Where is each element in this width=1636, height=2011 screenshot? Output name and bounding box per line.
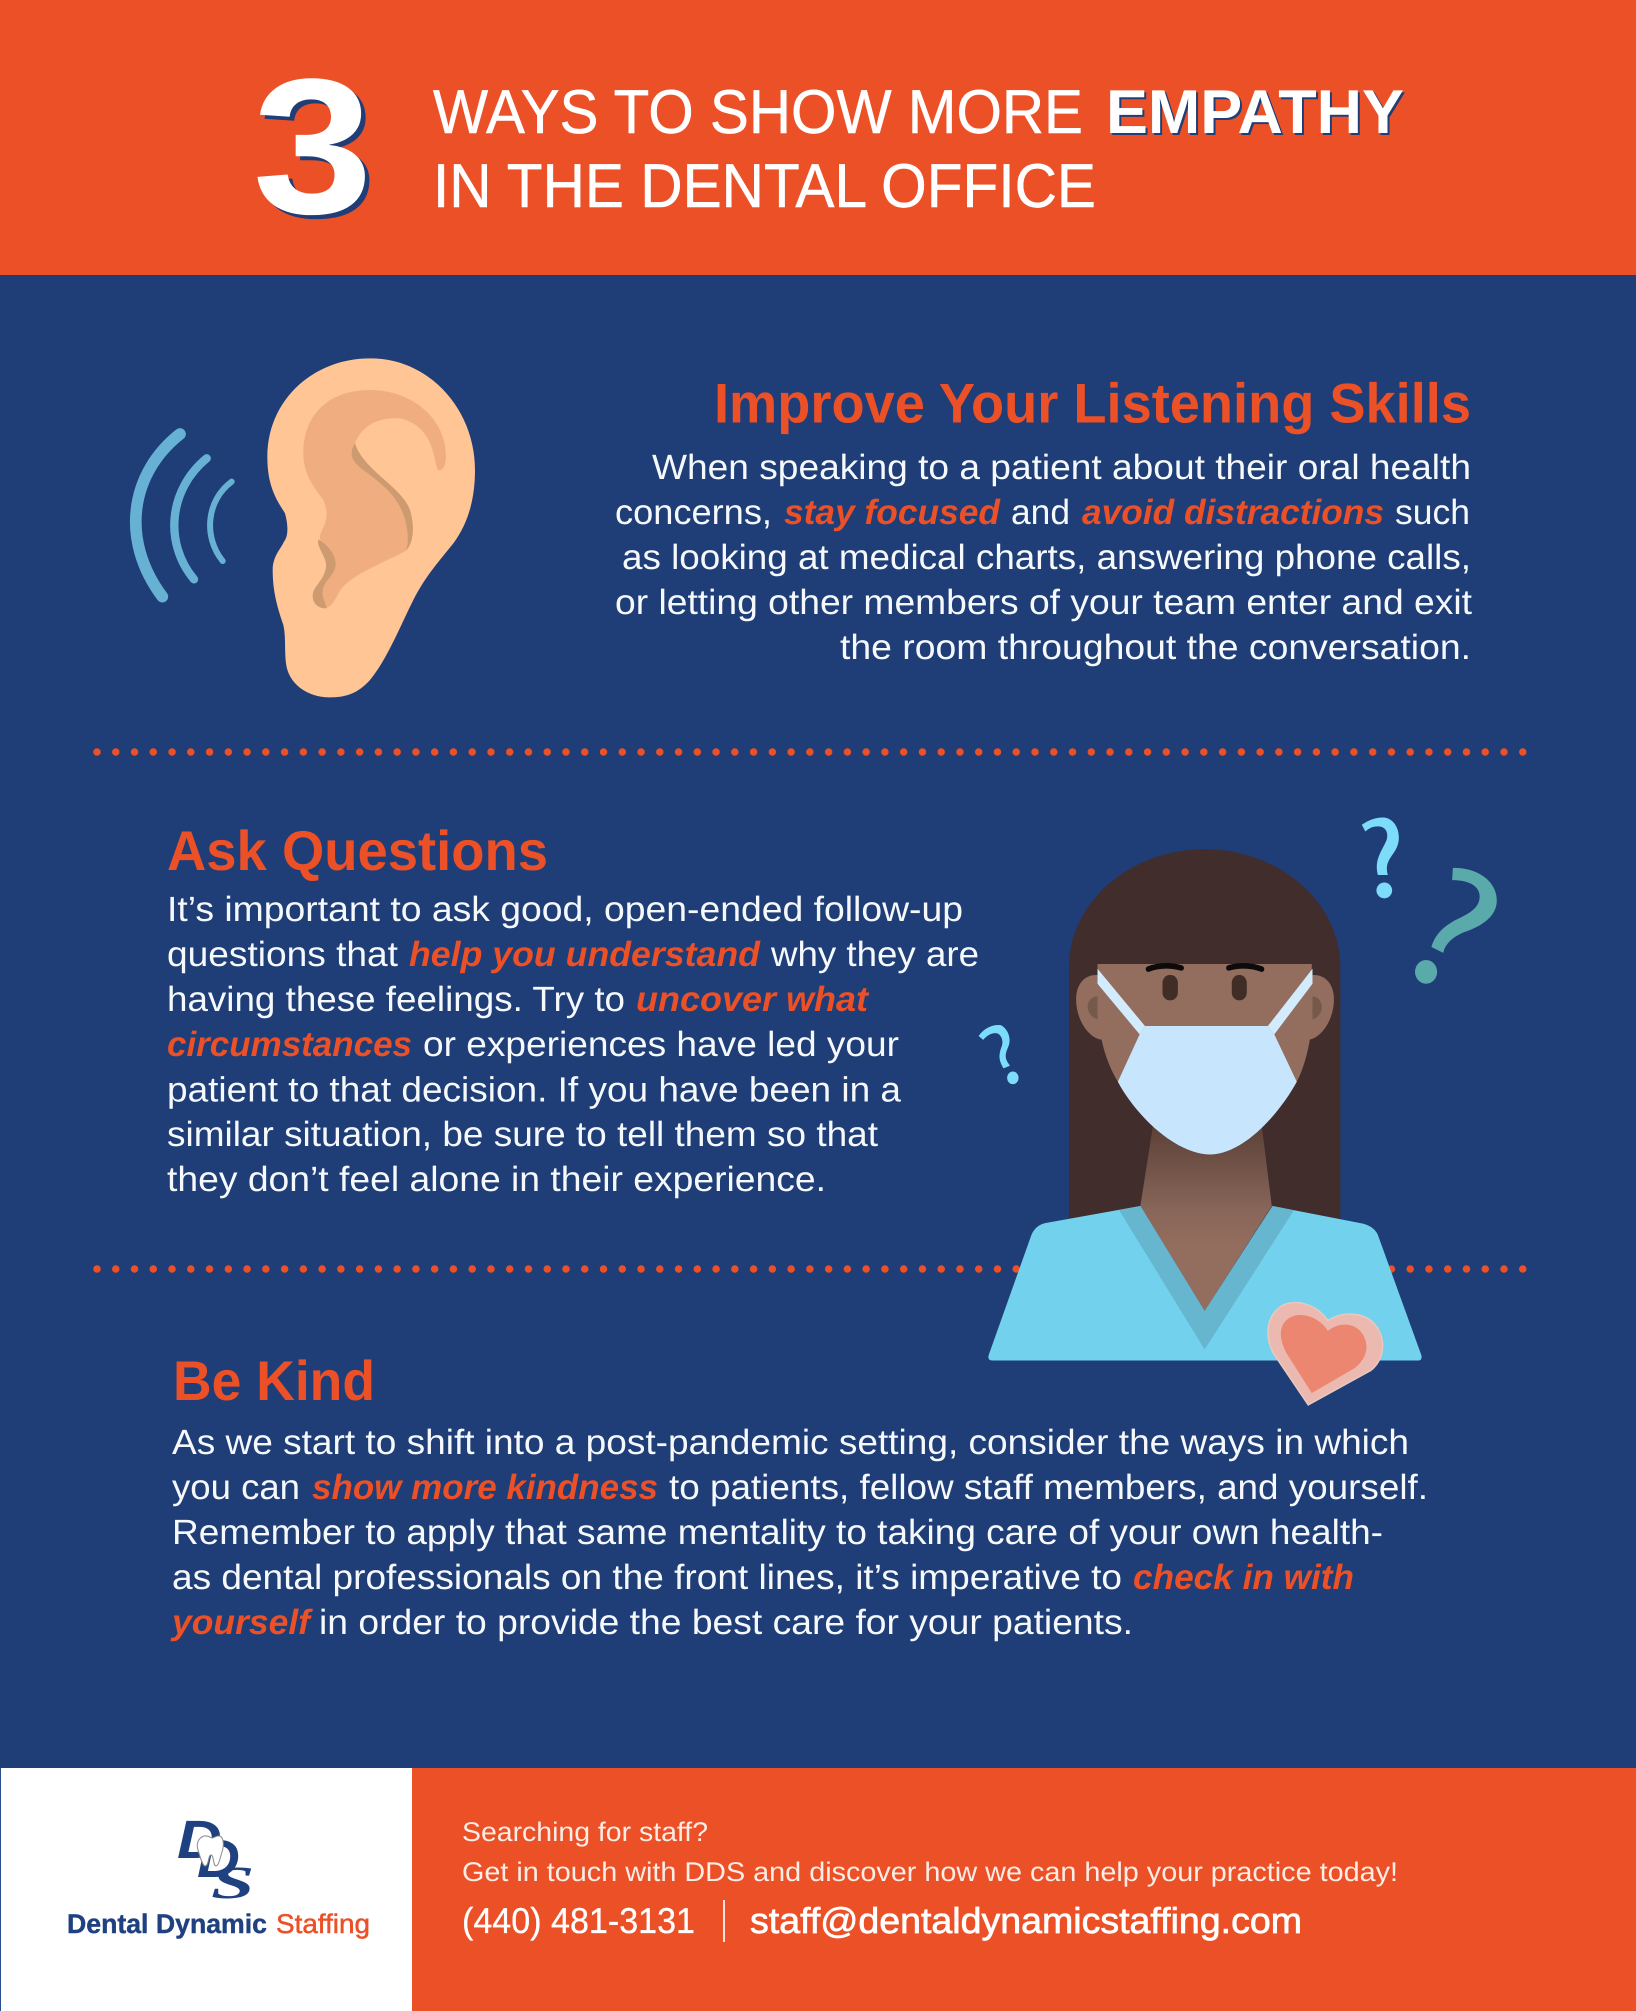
ears — [1076, 975, 1334, 1040]
body text: the room throughout the conversation. — [840, 628, 1471, 667]
hair — [1069, 849, 1340, 1225]
body text: to patients, fellow staff members, and yourself. — [669, 1468, 1428, 1507]
body text: as dental professionals on the front lines, it’s imperative to — [172, 1558, 1122, 1597]
body text: help you understand — [409, 935, 761, 974]
icon: ear with sound waves — [136, 358, 475, 697]
heading: Improve Your Listening Skills — [714, 372, 1471, 434]
contact text: Get in touch with DDS and discover how we can help your practice today! — [462, 1857, 1398, 1887]
section: ask questions — [167, 819, 979, 1199]
body text: they don’t feel alone in their experience. — [167, 1160, 826, 1199]
icon: DDS monogram: D — [197, 1829, 240, 1889]
body text: you can — [172, 1468, 300, 1507]
icon: question mark top — [1362, 817, 1399, 898]
neck — [1140, 1126, 1272, 1311]
icon: DDS monogram: S — [211, 1857, 255, 1908]
body text: or letting other members of your team enter and exit — [615, 583, 1472, 622]
body text: Remember to apply that same mentality to taking care of your own health- — [172, 1513, 1383, 1552]
body text: and — [1011, 493, 1070, 532]
title — [433, 78, 1406, 221]
divider: dotted line 2 — [97, 1265, 1528, 1273]
scrubs — [988, 1206, 1422, 1361]
icon: DDS monogram: D — [177, 1810, 222, 1870]
body text — [167, 890, 979, 1199]
icon: heart — [1268, 1303, 1383, 1405]
eyebrows — [1148, 966, 1262, 969]
body text: why they are — [770, 935, 979, 974]
big numeral 3: 3 — [252, 38, 373, 254]
body text: yourself — [170, 1603, 313, 1642]
icon: ear — [267, 358, 475, 697]
body text: in order to provide the best care for your patients. — [319, 1603, 1133, 1642]
icon: DDS monogram — [177, 1810, 255, 1908]
body text — [170, 1423, 1428, 1642]
body text: It’s important to ask good, open-ended follow-up — [167, 890, 963, 929]
icon: question mark small — [979, 1025, 1019, 1084]
body text: patient to that decision. If you have been in a — [167, 1070, 902, 1110]
collar — [1119, 1206, 1294, 1349]
logo wordmark: Dental Dynamic — [67, 1909, 267, 1939]
logo wordmark — [67, 1909, 370, 1939]
body text: When speaking to a patient about their oral health — [652, 448, 1471, 487]
eyes — [1162, 975, 1247, 1000]
title: EMPATHY — [1106, 78, 1404, 147]
big numeral 3: 3 — [257, 42, 377, 258]
body text: stay focused — [784, 493, 1001, 532]
face mask — [1097, 969, 1312, 1155]
body text: such — [1395, 493, 1470, 532]
body text — [615, 448, 1472, 667]
footer — [0, 1768, 1636, 2011]
contact text: (440) 481-3131 — [462, 1900, 695, 1941]
body text: having these feelings. Try to — [167, 980, 625, 1019]
heading: Ask Questions — [167, 819, 548, 882]
face — [1097, 964, 1312, 1146]
body text: as looking at medical charts, answering phone calls, — [622, 538, 1471, 577]
body text: show more kindness — [312, 1468, 658, 1507]
contact text: Searching for staff? — [462, 1817, 708, 1847]
contact text — [462, 1817, 1398, 1942]
body text: questions that — [167, 935, 398, 974]
heading: Be Kind — [173, 1349, 375, 1412]
body text: concerns, — [615, 493, 772, 532]
icon: sound waves — [136, 434, 232, 597]
body text: avoid distractions — [1082, 493, 1384, 532]
title: EMPATHY — [1108, 80, 1406, 149]
body text: circumstances — [167, 1025, 412, 1064]
body text: check in with — [1133, 1558, 1354, 1597]
icon: question mark large — [1415, 868, 1497, 984]
illustration: masked dental professional — [979, 817, 1497, 1405]
contact text: staff@dentaldynamicstaffing.com — [750, 1900, 1302, 1941]
body text: As we start to shift into a post-pandemic setting, consider the ways in which — [172, 1423, 1409, 1462]
header banner — [0, 0, 1636, 275]
section: be kind — [170, 1349, 1428, 1642]
section: improve your listening skills — [615, 372, 1472, 667]
body text: uncover what — [636, 980, 869, 1019]
panel: logo — [0, 1768, 412, 2011]
body text: or experiences have led your — [423, 1025, 899, 1064]
title: IN THE DENTAL OFFICE — [433, 152, 1096, 221]
logo wordmark: Staffing — [276, 1909, 370, 1939]
divider: dotted line 1 — [97, 748, 1528, 756]
title: WAYS TO SHOW MORE — [433, 78, 1083, 147]
body text: similar situation, be sure to tell them so that — [167, 1115, 878, 1154]
